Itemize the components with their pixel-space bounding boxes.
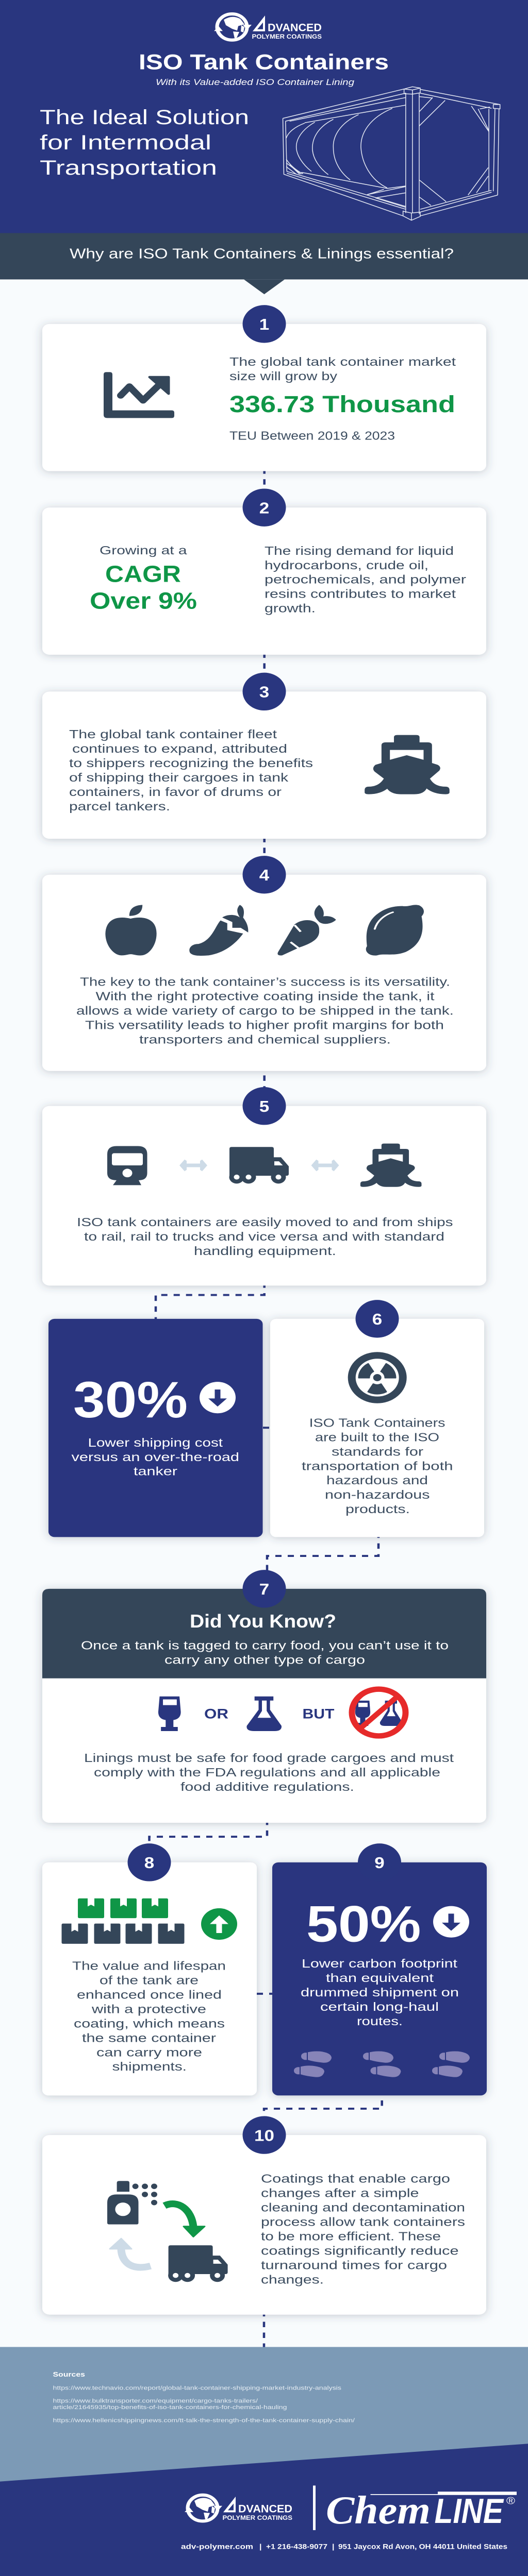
callout header: carry any other type of cargo — [164, 1654, 365, 1667]
text: value and lifespan: can carry more — [96, 2046, 202, 2059]
icon: lemon — [366, 905, 424, 956]
text: value and lifespan: with a protective — [91, 2003, 206, 2016]
arrow: light up — [110, 2239, 151, 2267]
text: food grade linings: comply with the FDA regulations and all applicable — [94, 1766, 440, 1780]
text: fleet: to shippers recognizing the benefits — [69, 757, 313, 770]
icon: spray bottle — [107, 2181, 157, 2225]
text: carbon footprint: certain long-haul — [320, 2001, 439, 2014]
badge 6 — [356, 1300, 399, 1338]
text: fleet: of shipping their cargoes in tank — [69, 771, 289, 785]
logo: Advanced Polymer Coatings: DVANCED — [268, 22, 322, 33]
illustration: tank container outline — [283, 87, 500, 221]
sources: https://www.hellenicshippingnews.com/tt-talk-the-strength-of-the-tank-container-supply-chain/ — [53, 2417, 355, 2424]
panel 2: CAGR — [42, 488, 486, 655]
logo: ChemLINE: Chem — [326, 2488, 431, 2532]
text: coatings — [261, 2173, 465, 2286]
text: rising demand: The rising demand for liquid — [265, 545, 454, 557]
text: value and lifespan — [72, 1960, 226, 2074]
callout header — [42, 1589, 486, 1679]
stat: 30%: 30% — [73, 1371, 188, 1428]
icon: train — [107, 1146, 147, 1185]
text: ISO standards — [302, 1417, 453, 1516]
icon: prohibited glass and flask — [355, 1701, 402, 1726]
text: rising demand: hydrocarbons, crude oil, — [265, 559, 428, 572]
text: ISO standards: ISO Tank Containers — [309, 1417, 446, 1430]
icon: chili — [189, 905, 248, 956]
text: ISO standards: are built to the ISO — [315, 1431, 439, 1444]
logo: ChemLINE: ® — [506, 2496, 515, 2506]
badge 10: 10 — [254, 2127, 274, 2144]
text: market size: 336.73 Thousand — [229, 392, 455, 417]
text: ISO standards: standards for — [332, 1446, 423, 1459]
icon: stacked boxes — [62, 1899, 185, 1944]
panel 1: market growth — [42, 305, 486, 471]
banner: section question — [0, 233, 528, 294]
contact line: adv-polymer.com — [181, 2543, 253, 2551]
text: coatings: cleaning and decontamination — [261, 2201, 465, 2214]
logo: Advanced Polymer Coatings: POLYMER COATINGS — [223, 2514, 292, 2521]
text: coatings: turnaround times for cargo — [261, 2259, 447, 2272]
text: shipping cost: Lower shipping cost — [88, 1436, 223, 1449]
text: fleet: containers, in favor of drums or — [69, 786, 282, 799]
text: ISO standards: non-hazardous — [325, 1489, 430, 1502]
panel 4: versatility — [42, 856, 486, 1071]
panel 10: cargo changes — [42, 2116, 486, 2315]
text: carbon footprint — [301, 1958, 459, 2028]
badge 5 — [242, 1087, 286, 1125]
icon: ship — [365, 735, 450, 794]
badge 4: 4 — [259, 866, 270, 884]
text: coatings: changes after a simple — [261, 2187, 419, 2200]
icon: radiation hazard — [352, 1355, 403, 1400]
text: fleet: The global tank container fleet — [69, 728, 277, 741]
badge 7 — [242, 1570, 286, 1608]
text: market size: The global tank container market — [229, 356, 456, 369]
text: value and lifespan: The value and lifespan — [72, 1960, 226, 1973]
text: OR: OR — [204, 1706, 228, 1722]
badge 6: 6 — [372, 1310, 382, 1328]
panel: 30% lower shipping cost — [48, 1319, 263, 1537]
panel 3: fleet expansion — [42, 673, 486, 839]
badge 9: 9 — [374, 1854, 385, 1872]
badge 9 — [358, 1843, 401, 1882]
icons: food cargo — [105, 905, 424, 956]
badge 3: 3 — [259, 683, 269, 701]
icon: truck — [168, 2245, 228, 2282]
text: versatility — [76, 976, 454, 1046]
text: carbon footprint: drummed shipment on — [301, 1987, 459, 1999]
text: carbon footprint: than equivalent — [326, 1972, 434, 1985]
sources: Sources — [53, 2370, 85, 2378]
connector lines — [150, 468, 382, 2347]
text: ISO standards: hazardous and — [326, 1475, 428, 1487]
badge 1 — [242, 305, 286, 343]
badge 8: 8 — [144, 1854, 154, 1872]
text: BUT: BUT — [302, 1706, 335, 1722]
text: carbon footprint: Lower carbon footprint — [302, 1958, 457, 1971]
contact line: +1 216-438-9077 — [266, 2543, 327, 2551]
angled band — [0, 2444, 528, 2576]
text: versatility: With the right protective coating inside the tank, it — [96, 990, 435, 1003]
headline: for Intermodal — [40, 131, 211, 154]
icon: down arrow — [433, 1906, 469, 1938]
text: intermodal moves — [77, 1216, 453, 1258]
text: market size — [229, 356, 456, 443]
callout header: Did You Know? — [190, 1611, 336, 1632]
sources — [53, 2370, 355, 2424]
text: ISO standards: transportation of both — [302, 1460, 453, 1473]
title: ISO Tank Containers — [139, 49, 389, 74]
logo: Advanced Polymer Coatings: POLYMER COATINGS — [252, 33, 322, 40]
footer — [0, 2347, 528, 2576]
icon: wine glass — [158, 1697, 181, 1731]
text: coatings: to be more efficient. These — [261, 2230, 441, 2243]
badge 1: 1 — [259, 315, 269, 333]
logo: Advanced Polymer Coatings — [214, 14, 322, 40]
icon: footprints — [294, 2051, 470, 2077]
sources: https://www.bulktransporter.com/equipment/cargo-tanks-trailers/ — [53, 2398, 258, 2404]
subtitle: With its Value-added ISO Container Lining — [156, 77, 354, 87]
panel 7: did you know — [42, 1570, 486, 1823]
sources: article/21645935/top-benefits-of-iso-tank-containers-for-chemical-hauling — [53, 2404, 287, 2411]
text: rising demand: growth. — [265, 602, 316, 615]
sources: https://www.technavio.com/report/global-tank-container-shipping-market-industry-analysis — [53, 2384, 341, 2391]
arrow: green down — [164, 2204, 205, 2236]
icon row: glass, flask, prohibited — [158, 1697, 402, 1731]
panel 5: intermodal — [42, 1087, 486, 1285]
badge 8 — [128, 1843, 171, 1882]
badge 5: 5 — [259, 1097, 269, 1115]
text: shipping cost: versus an over-the-road — [72, 1451, 239, 1464]
text: versatility: The key to the tank container’s success is its versatility. — [80, 976, 450, 989]
text: intermodal moves: handling equipment. — [194, 1245, 336, 1258]
text: coatings: Coatings that enable cargo — [261, 2173, 450, 2185]
logo: ChemLINE: LINE — [435, 2492, 504, 2531]
badge 2: 2 — [259, 499, 269, 517]
text: fleet: continues to expand, attributed — [72, 743, 287, 756]
text: value and lifespan: coating, which means — [74, 2018, 225, 2030]
text: value and lifespan: the same container — [82, 2032, 216, 2045]
text: market size: size will grow by — [229, 370, 338, 383]
callout header: Once a tank is tagged to carry food, you can’t use it to — [81, 1639, 449, 1652]
icon: flask — [246, 1697, 282, 1731]
text: rising demand: petrochemicals, and polymer — [265, 573, 466, 586]
text: coatings: changes. — [261, 2274, 324, 2286]
text: coatings: coatings significantly reduce — [261, 2245, 459, 2258]
text: food grade linings: food additive regulations. — [180, 1781, 354, 1794]
stat: CAGR over 9%: Growing at a — [100, 544, 187, 557]
headline: Transportation — [40, 157, 217, 179]
stat: CAGR over 9%: Over 9% — [90, 588, 197, 614]
text: value and lifespan: enhanced once lined — [77, 1989, 222, 2002]
stat: CAGR over 9%: CAGR — [105, 561, 181, 587]
logo divider — [313, 2485, 316, 2530]
icon: up arrow — [201, 1908, 237, 1940]
header band — [0, 0, 528, 233]
text: market size: TEU Between 2019 & 2023 — [229, 430, 395, 443]
text: carbon footprint: routes. — [357, 2015, 403, 2028]
icon: prohibition sign — [352, 1689, 405, 1736]
text: fleet: parcel tankers. — [69, 800, 170, 814]
text: versatility: allows a wide variety of cargo to be shipped in the tank. — [76, 1005, 454, 1018]
text: shipping cost: tanker — [134, 1465, 177, 1478]
badge 4 — [242, 856, 286, 893]
icon: down arrow — [200, 1382, 236, 1413]
logo: Advanced Polymer Coatings — [185, 2495, 292, 2521]
panel 9: lower carbon footprint — [272, 1843, 487, 2095]
text: coatings: process allow tank containers — [261, 2216, 465, 2229]
contact line: 951 Jaycox Rd Avon, OH 44011 United States — [338, 2543, 507, 2551]
icon: apple — [105, 905, 157, 956]
panel 8: more shipments — [42, 1843, 257, 2095]
arrow: truck to ship — [311, 1160, 339, 1171]
text: shipping cost — [72, 1436, 239, 1478]
icon: truck — [229, 1147, 289, 1183]
badge 2 — [242, 488, 286, 527]
banner: section question: Why are ISO Tank Containers & Linings essential? — [70, 246, 454, 262]
icon: ship — [360, 1144, 422, 1187]
panel 6: ISO standards — [270, 1300, 484, 1537]
text: value and lifespan: shipments. — [112, 2061, 187, 2074]
headline — [40, 106, 249, 179]
text: value and lifespan: of the tank are — [100, 1974, 199, 1987]
logo: ChemLINE — [326, 2488, 517, 2532]
text: versatility: This versatility leads to higher profit margins for both — [85, 1019, 444, 1032]
stat: CAGR over 9% — [90, 544, 197, 614]
text: intermodal moves: to rail, rail to trucks and vice versa and with standard — [84, 1230, 444, 1243]
arrow: train to truck — [179, 1160, 207, 1171]
stat: 50%: 50% — [306, 1895, 421, 1953]
icon: carrot — [277, 905, 336, 955]
text: food grade linings — [84, 1752, 454, 1794]
badge 7: 7 — [259, 1580, 269, 1598]
contact line: | — [259, 2543, 261, 2551]
icon: rising chart — [104, 372, 174, 418]
contact line: | — [332, 2543, 334, 2551]
badge 10 — [242, 2116, 286, 2154]
text: versatility: transporters and chemical suppliers. — [139, 1033, 391, 1046]
text: rising demand — [265, 545, 466, 615]
headline: The Ideal Solution — [40, 106, 249, 129]
text: fleet — [69, 728, 313, 814]
text: intermodal moves: ISO tank containers are easily moved to and from ships — [77, 1216, 453, 1229]
text: ISO standards: products. — [345, 1503, 410, 1516]
logo: Advanced Polymer Coatings: DVANCED — [238, 2503, 292, 2515]
contact line — [181, 2543, 507, 2551]
text: rising demand: resins contributes to market — [265, 588, 456, 601]
badge 3 — [242, 673, 286, 710]
text: food grade linings: Linings must be safe for food grade cargoes and must — [84, 1752, 454, 1765]
